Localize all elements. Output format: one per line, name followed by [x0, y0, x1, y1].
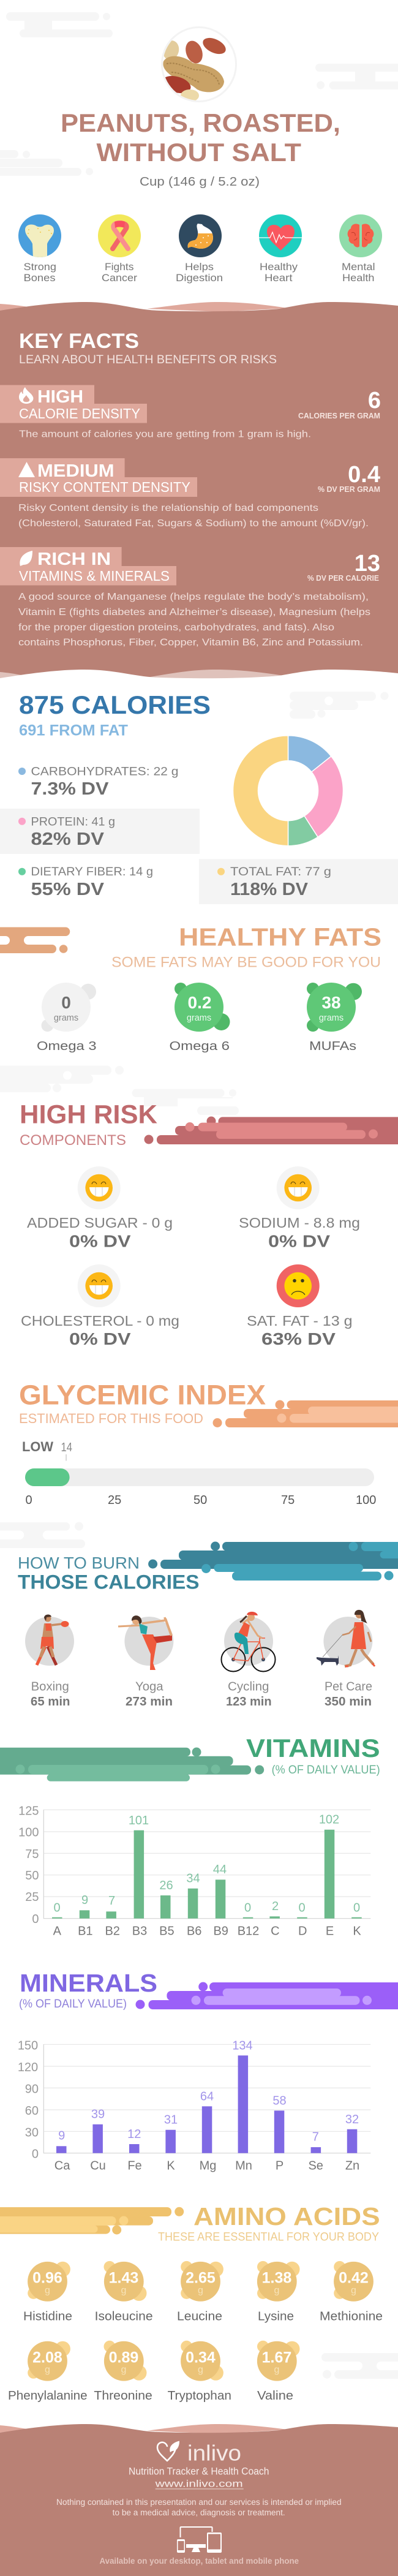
stat: methionine: 0.42 [339, 2270, 369, 2287]
stat: methionine [320, 2261, 383, 2323]
stat: leucine: Leucine [177, 2310, 222, 2323]
risk: added sugar: 0% DV [69, 1231, 131, 1251]
serving size: Cup (146 g / 5.2 oz) [140, 175, 260, 189]
icon: leaf [20, 551, 32, 566]
bar chart: minerals: 0 [32, 2147, 39, 2161]
panel: high risk [0, 1066, 398, 1348]
heading: vitamins [246, 1734, 380, 1777]
logo: inlivo: inlivo [187, 2440, 241, 2465]
icon: warning triangle [18, 462, 35, 477]
decorative streak: teal [148, 1541, 398, 1581]
stat: omega 6: Omega 6 [169, 1040, 230, 1053]
stat: valine [257, 2341, 300, 2403]
title: PEANUTS, ROASTED, [61, 108, 340, 137]
legend: protein [18, 815, 115, 849]
heading: how to burn [18, 1554, 200, 1593]
fact: rich in vitamins and minerals: 13 [355, 551, 380, 576]
risk: saturated fat [247, 1264, 353, 1348]
legend: dietary fiber [18, 865, 153, 899]
activity: yoga: Yoga [135, 1680, 163, 1693]
bar chart: minerals: P [276, 2159, 283, 2173]
bar chart: vitamins: B5 [159, 1924, 175, 1938]
bar chart: minerals: 9 [58, 2129, 65, 2143]
fact: rich in vitamins and minerals [0, 547, 380, 648]
heading: calories: 875 CALORIES [19, 690, 211, 719]
bar chart: minerals: Zn [345, 2159, 359, 2173]
stat: tryptophan [168, 2341, 231, 2403]
heading: minerals: (% OF DAILY VALUE) [19, 1998, 127, 2011]
stat: omega 3: grams [54, 1013, 78, 1023]
fact: high calorie density: CALORIES PER GRAM [298, 412, 380, 420]
bar chart: vitamins: 50 [25, 1869, 39, 1883]
icon: mental health [339, 214, 382, 284]
stat: leucine: g [198, 2285, 203, 2295]
activity: yoga [118, 1615, 173, 1709]
legend: total fat [217, 865, 331, 899]
bar chart: vitamins: 25 [25, 1890, 39, 1904]
stat: mufas: MUFAs [309, 1040, 356, 1053]
disclaimer: Nothing contained in this presentation and our services is intended or implied [56, 2498, 342, 2507]
icon: helps digestion: Digestion [176, 272, 223, 284]
stat: tryptophan: g [198, 2365, 203, 2375]
fact: medium risky content density: (Cholesterol, Saturated Fat, Sugars & Sodium) to the amount (%DV/gr). [18, 518, 369, 529]
bar chart: minerals: Fe [127, 2159, 142, 2173]
stat: omega 3: Omega 3 [37, 1040, 97, 1053]
decorative streak: purple [136, 1982, 398, 2009]
bar chart: vitamins: 9 [81, 1894, 88, 1907]
risk: saturated fat: 63% DV [261, 1329, 336, 1348]
fact: rich in vitamins and minerals: Vitamin E (fights diabetes and Alzheimer’s disease), Magnesium (helps [18, 607, 370, 618]
gauge: glycemic value: 75 [281, 1494, 295, 1507]
bar chart: vitamins: 26 [159, 1879, 173, 1892]
gauge: glycemic value: 25 [108, 1494, 121, 1507]
fact: rich in vitamins and minerals: A good source of Manganese (helps regulate the body’s metabolism), [18, 592, 369, 602]
stat: phenylalanine: 2.08 [32, 2349, 62, 2366]
gauge: glycemic value [22, 1439, 376, 1507]
bar chart: vitamins [18, 1805, 370, 1938]
stat: lysine [257, 2261, 300, 2323]
legend: carbohydrates: 7.3% DV [31, 779, 109, 799]
risk: sodium [239, 1166, 360, 1251]
bar chart: vitamins: 2 [272, 1900, 279, 1913]
bar chart: minerals: 90 [25, 2083, 39, 2096]
icon: mental health: Health [342, 272, 375, 284]
bar chart: vitamins: 101 [129, 1814, 149, 1827]
legend: total fat: TOTAL FAT: 77 g [230, 865, 331, 878]
heading: healthy fats [111, 923, 381, 971]
fact: high calorie density: The amount of calories you are getting from 1 gram is high. [19, 429, 311, 440]
bar chart: minerals: Mn [235, 2159, 252, 2173]
bar chart: vitamins: 125 [18, 1805, 39, 1818]
bar chart: minerals: 58 [272, 2094, 287, 2108]
bar chart: minerals: Mg [200, 2159, 216, 2173]
stat: histidine: Histidine [23, 2310, 72, 2323]
legend: dietary fiber: DIETARY FIBER: 14 g [31, 865, 153, 878]
heading: amino acids [158, 2202, 380, 2244]
bar chart: minerals [18, 2039, 370, 2173]
bar chart: minerals: 64 [200, 2090, 214, 2103]
activity: cycling [222, 1612, 276, 1709]
bar chart: vitamins: B3 [132, 1924, 147, 1938]
bar chart: vitamins: B1 [78, 1924, 93, 1938]
stat: omega 6: 0.2 [188, 993, 211, 1012]
panel: key facts [0, 302, 398, 683]
bar chart: minerals: 30 [25, 2126, 39, 2139]
stat: omega 3: 0 [61, 993, 71, 1012]
bar chart: minerals: 12 [127, 2128, 141, 2141]
risk: cholesterol [21, 1264, 179, 1348]
title: WITHOUT SALT [97, 138, 301, 167]
icon: mental health: Mental [342, 261, 375, 273]
risk: sodium: 0% DV [268, 1231, 330, 1251]
stat: leucine [177, 2261, 223, 2323]
stat: threonine: g [121, 2365, 126, 2375]
bar chart: minerals: 120 [18, 2061, 38, 2074]
panel: minerals [18, 1969, 398, 2173]
decorative streak: orange [0, 927, 70, 953]
stat: valine: g [274, 2365, 279, 2375]
band backgrounds [0, 809, 398, 904]
stat: phenylalanine: Phenylalanine [8, 2389, 88, 2403]
availability note: Available on your desktop, tablet and mobile phone [99, 2556, 299, 2566]
gauge: glycemic value: 0 [26, 1494, 32, 1507]
risk: saturated fat: SAT. FAT - 13 g [247, 1313, 353, 1329]
bar chart: vitamins: B6 [187, 1924, 201, 1938]
bar chart: minerals: Cu [90, 2159, 106, 2173]
fact: rich in vitamins and minerals: % DV PER CALORIE [307, 574, 379, 583]
panel: how to burn calories [0, 1522, 398, 1709]
gauge: glycemic value: 50 [193, 1494, 207, 1507]
icon: healthy heart: Healthy [260, 261, 298, 273]
stat: histidine: 0.96 [32, 2270, 62, 2287]
bar chart: vitamins: B2 [105, 1924, 120, 1938]
activity: boxing: 65 min [31, 1694, 70, 1709]
heading: how to burn: HOW TO BURN [18, 1554, 140, 1572]
tagline and url [129, 2466, 269, 2490]
bar chart: vitamins: D [298, 1924, 307, 1938]
fact: rich in vitamins and minerals: VITAMINS & MINERALS [19, 568, 170, 584]
icon: helps digestion [176, 214, 223, 284]
risk: added sugar [27, 1166, 173, 1251]
legend: carbohydrates [18, 765, 179, 799]
stat: leucine: 2.65 [186, 2270, 216, 2287]
icon: fights cancer [98, 214, 141, 284]
bar chart: minerals: 39 [91, 2108, 105, 2121]
bar chart: vitamins: 0 [298, 1902, 306, 1915]
icon: helps digestion: Helps [185, 261, 214, 273]
stat: isoleucine: g [121, 2285, 126, 2295]
legend: dietary fiber: 55% DV [31, 880, 104, 899]
tagline and url: www.inlivo.com [154, 2479, 243, 2490]
heading: glycemic index [19, 1380, 266, 1426]
icon: strong bones [18, 214, 61, 284]
risk: cholesterol: CHOLESTEROL - 0 mg [21, 1313, 179, 1329]
panel: footer [0, 2424, 398, 2576]
heading: amino acids: AMINO ACIDS [193, 2202, 380, 2230]
icon: fights cancer: Fights [105, 261, 133, 273]
stat: mufas [307, 983, 362, 1053]
heading: healthy fats: SOME FATS MAY BE GOOD FOR YOU [111, 954, 381, 971]
bar chart: minerals: Ca [54, 2159, 70, 2173]
legend: carbohydrates: CARBOHYDRATES: 22 g [31, 765, 179, 779]
legend: total fat: 118% DV [230, 880, 308, 899]
panel: vitamins [0, 1734, 380, 1938]
panel: glycemic index [19, 1380, 398, 1507]
benefit icons row [18, 214, 382, 284]
panel: healthy fats [0, 923, 381, 1053]
bar chart: vitamins: 0 [32, 1913, 39, 1926]
legend: protein: 82% DV [31, 829, 104, 849]
icon: devices [177, 2527, 222, 2553]
fact: high calorie density: HIGH [37, 387, 83, 407]
heading: vitamins: (% OF DAILY VALUE) [272, 1764, 380, 1777]
bar chart: vitamins: 44 [213, 1863, 227, 1876]
stat: valine: Valine [257, 2389, 293, 2403]
stat: phenylalanine [8, 2341, 88, 2403]
title [61, 108, 340, 167]
decorative streak: green [0, 1747, 264, 1781]
bar chart: minerals: 60 [25, 2104, 39, 2118]
bar chart: vitamins: 0 [244, 1902, 251, 1915]
stat: mufas: grams [319, 1013, 344, 1023]
bar chart: vitamins: 75 [25, 1848, 39, 1861]
panel: calories [0, 690, 398, 904]
risk: cholesterol: 0% DV [69, 1329, 131, 1348]
stat: isoleucine: Isoleucine [95, 2310, 153, 2323]
stat: omega 6: grams [187, 1013, 211, 1023]
heading: calories [19, 690, 211, 739]
icon: healthy heart: Heart [265, 272, 293, 284]
stat: lysine: Lysine [258, 2310, 294, 2323]
heading: vitamins: VITAMINS [246, 1734, 380, 1762]
activity: boxing [25, 1614, 74, 1709]
fact: medium risky content density [0, 458, 380, 529]
risk: sodium: SODIUM - 8.8 mg [239, 1215, 360, 1231]
heading: calories: 691 FROM FAT [19, 722, 128, 739]
bar chart: vitamins: 102 [319, 1813, 339, 1827]
gauge: glycemic value: 100 [356, 1494, 376, 1507]
heading: glycemic index: ESTIMATED FOR THIS FOOD [19, 1411, 203, 1426]
bar chart: minerals: 7 [312, 2130, 319, 2144]
bar chart: vitamins: K [353, 1924, 361, 1938]
stat: threonine: Threonine [94, 2389, 152, 2403]
fact: rich in vitamins and minerals: contains Phosphorus, Fiber, Copper, Vitamin B6, Zinc and Potassium. [18, 638, 363, 648]
stat: methionine: g [351, 2285, 356, 2295]
stat: histidine [23, 2262, 72, 2323]
bar chart: vitamins: B9 [213, 1924, 228, 1938]
heading: how to burn: THOSE CALORIES [18, 1571, 200, 1593]
bar chart: vitamins: C [271, 1924, 280, 1938]
icon: flame [19, 387, 33, 404]
icon: healthy heart [259, 214, 302, 284]
stat: tryptophan: 0.34 [186, 2349, 216, 2366]
image: peanuts photo [160, 27, 236, 102]
logo: inlivo [157, 2440, 241, 2465]
heading: key facts [19, 330, 277, 366]
stat: methionine: Methionine [320, 2310, 383, 2323]
stat: omega 6 [169, 983, 230, 1053]
stat: phenylalanine: g [45, 2365, 50, 2375]
stat: histidine: g [45, 2285, 50, 2295]
bar chart: vitamins: B12 [238, 1924, 259, 1938]
bar chart: minerals: K [167, 2159, 175, 2173]
fact: rich in vitamins and minerals: for the proper digestion proteins, carbohydrates, and fats). Also [18, 622, 334, 633]
activity: pet care: Pet Care [325, 1680, 372, 1693]
gauge: glycemic value: 14 [61, 1441, 72, 1454]
decorative streak: red [145, 1116, 398, 1144]
panel: header [0, 12, 398, 284]
decorative streak: orange [213, 1400, 398, 1427]
stat: lysine: g [274, 2285, 279, 2295]
fact: medium risky content density: 0.4 [348, 462, 380, 488]
icon: strong bones: Strong [23, 261, 56, 273]
stat: mufas: 38 [321, 993, 341, 1012]
heading: high risk: HIGH RISK [20, 1100, 157, 1130]
fact: high calorie density: CALORIE DENSITY [19, 406, 140, 421]
bar chart: vitamins: A [53, 1924, 62, 1938]
stat: isoleucine [95, 2261, 153, 2323]
heading: amino acids: THESE ARE ESSENTIAL FOR YOUR BODY [158, 2231, 379, 2244]
heading: key facts: LEARN ABOUT HEALTH BENEFITS OR RISKS [19, 353, 277, 366]
tagline and url: Nutrition Tracker & Health Coach [129, 2466, 269, 2477]
bar chart: vitamins: 7 [108, 1894, 115, 1908]
bar chart: vitamins: E [326, 1924, 334, 1938]
heading: healthy fats: HEALTHY FATS [179, 923, 381, 951]
heading: high risk: COMPONENTS [20, 1132, 126, 1149]
bar chart: minerals: 150 [18, 2039, 38, 2053]
donut chart [233, 736, 343, 846]
stat: valine: 1.67 [262, 2349, 291, 2366]
fact: rich in vitamins and minerals: RICH IN [37, 550, 111, 569]
activity: yoga: 273 min [126, 1694, 173, 1709]
gauge: glycemic value: LOW [22, 1439, 53, 1454]
stat: tryptophan: Tryptophan [168, 2389, 231, 2403]
heading: minerals: MINERALS [20, 1969, 157, 1997]
bar chart: vitamins: 100 [18, 1826, 39, 1840]
heading: glycemic index: GLYCEMIC INDEX [19, 1380, 266, 1411]
decorative streak: yellow [0, 2207, 184, 2235]
fact: medium risky content density: % DV PER GRAM [318, 485, 380, 494]
disclaimer [56, 2498, 342, 2517]
panel: amino acids [0, 2202, 398, 2403]
fact: medium risky content density: Risky Content density is the relationship of bad components [18, 503, 318, 513]
activity: pet care [317, 1610, 375, 1709]
fact: medium risky content density: MEDIUM [37, 461, 115, 481]
stat: omega 3 [37, 983, 97, 1053]
fact: high calorie density [0, 385, 381, 440]
bar chart: vitamins: 0 [353, 1902, 360, 1915]
activity: cycling: Cycling [228, 1680, 269, 1693]
bar chart: minerals: 31 [164, 2113, 178, 2127]
fact: high calorie density: 6 [368, 388, 381, 414]
icon: fights cancer: Cancer [102, 272, 137, 284]
heading: minerals [19, 1969, 157, 2011]
activity: pet care: 350 min [325, 1694, 372, 1709]
heading: key facts: KEY FACTS [19, 330, 139, 353]
bar chart: minerals: Se [308, 2159, 323, 2173]
bar chart: vitamins: 34 [186, 1872, 200, 1886]
bar chart: vitamins: 0 [53, 1902, 61, 1915]
stat: lysine: 1.38 [262, 2270, 291, 2287]
stat: threonine [94, 2341, 152, 2403]
icon: strong bones: Bones [23, 272, 55, 284]
bar chart: minerals: 134 [232, 2039, 253, 2053]
risk: added sugar: ADDED SUGAR - 0 g [27, 1215, 173, 1231]
bar chart: minerals: 32 [345, 2113, 359, 2126]
legend: protein: PROTEIN: 41 g [31, 815, 115, 829]
activity: cycling: 123 min [226, 1694, 272, 1709]
heading: high risk [20, 1100, 157, 1149]
stat: isoleucine: 1.43 [109, 2270, 138, 2287]
fact: medium risky content density: RISKY CONTENT DENSITY [19, 479, 190, 495]
activity: boxing: Boxing [31, 1680, 69, 1693]
stat: threonine: 0.89 [109, 2349, 138, 2366]
disclaimer: to be a medical advice, diagnosis or treatment. [113, 2508, 285, 2517]
